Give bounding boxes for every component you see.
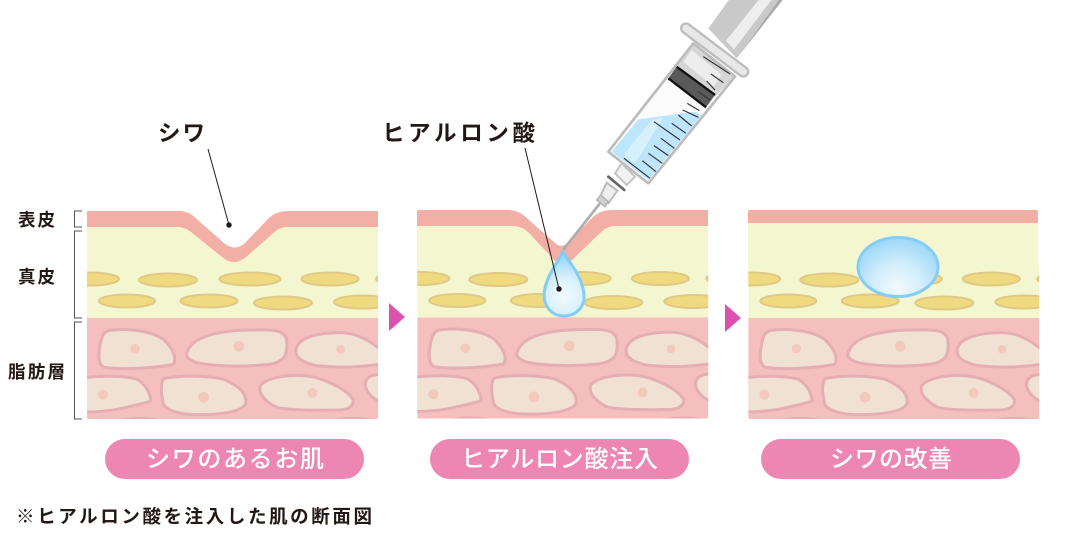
hyaluronic acid blob: [858, 238, 938, 296]
caption pill 2: [430, 439, 689, 479]
panel: improved skin: [748, 210, 1040, 419]
panel: wrinkled skin: [87, 211, 378, 419]
epidermis flat: [748, 210, 1038, 223]
bracket: dermis: [74, 231, 82, 318]
epidermis with notch: [417, 210, 708, 262]
syringe: [563, 0, 784, 250]
bracket: fat layer: [74, 322, 82, 419]
label: fat layer: 脂肪層: [8, 362, 65, 382]
hyaluronic acid drop: [544, 252, 584, 316]
panel: injection: [417, 210, 708, 418]
footnote: ※ヒアルロン酸を注入した肌の断面図: [16, 506, 372, 527]
label: dermis: 真皮: [18, 267, 55, 287]
arrow: step 2 to 3: [725, 304, 741, 332]
caption pill 3: シワの改善: [830, 446, 952, 473]
label: wrinkle with leader line: [158, 121, 232, 228]
label: epidermis: 表皮: [18, 210, 55, 230]
caption pill 1: [105, 439, 364, 479]
caption pill 3: [761, 439, 1020, 479]
bracket: epidermis: [74, 211, 82, 227]
label: wrinkle with leader line: シワ: [158, 121, 205, 146]
epidermis with wrinkle: [87, 211, 378, 262]
label: hyaluronic acid with leader line: ヒアルロン酸: [382, 121, 535, 146]
label: hyaluronic acid with leader line: [382, 121, 562, 292]
caption pill 2: ヒアルロン酸注入: [461, 446, 658, 473]
caption pill 1: シワのあるお肌: [146, 446, 324, 473]
arrow: step 1 to 2: [389, 303, 405, 331]
